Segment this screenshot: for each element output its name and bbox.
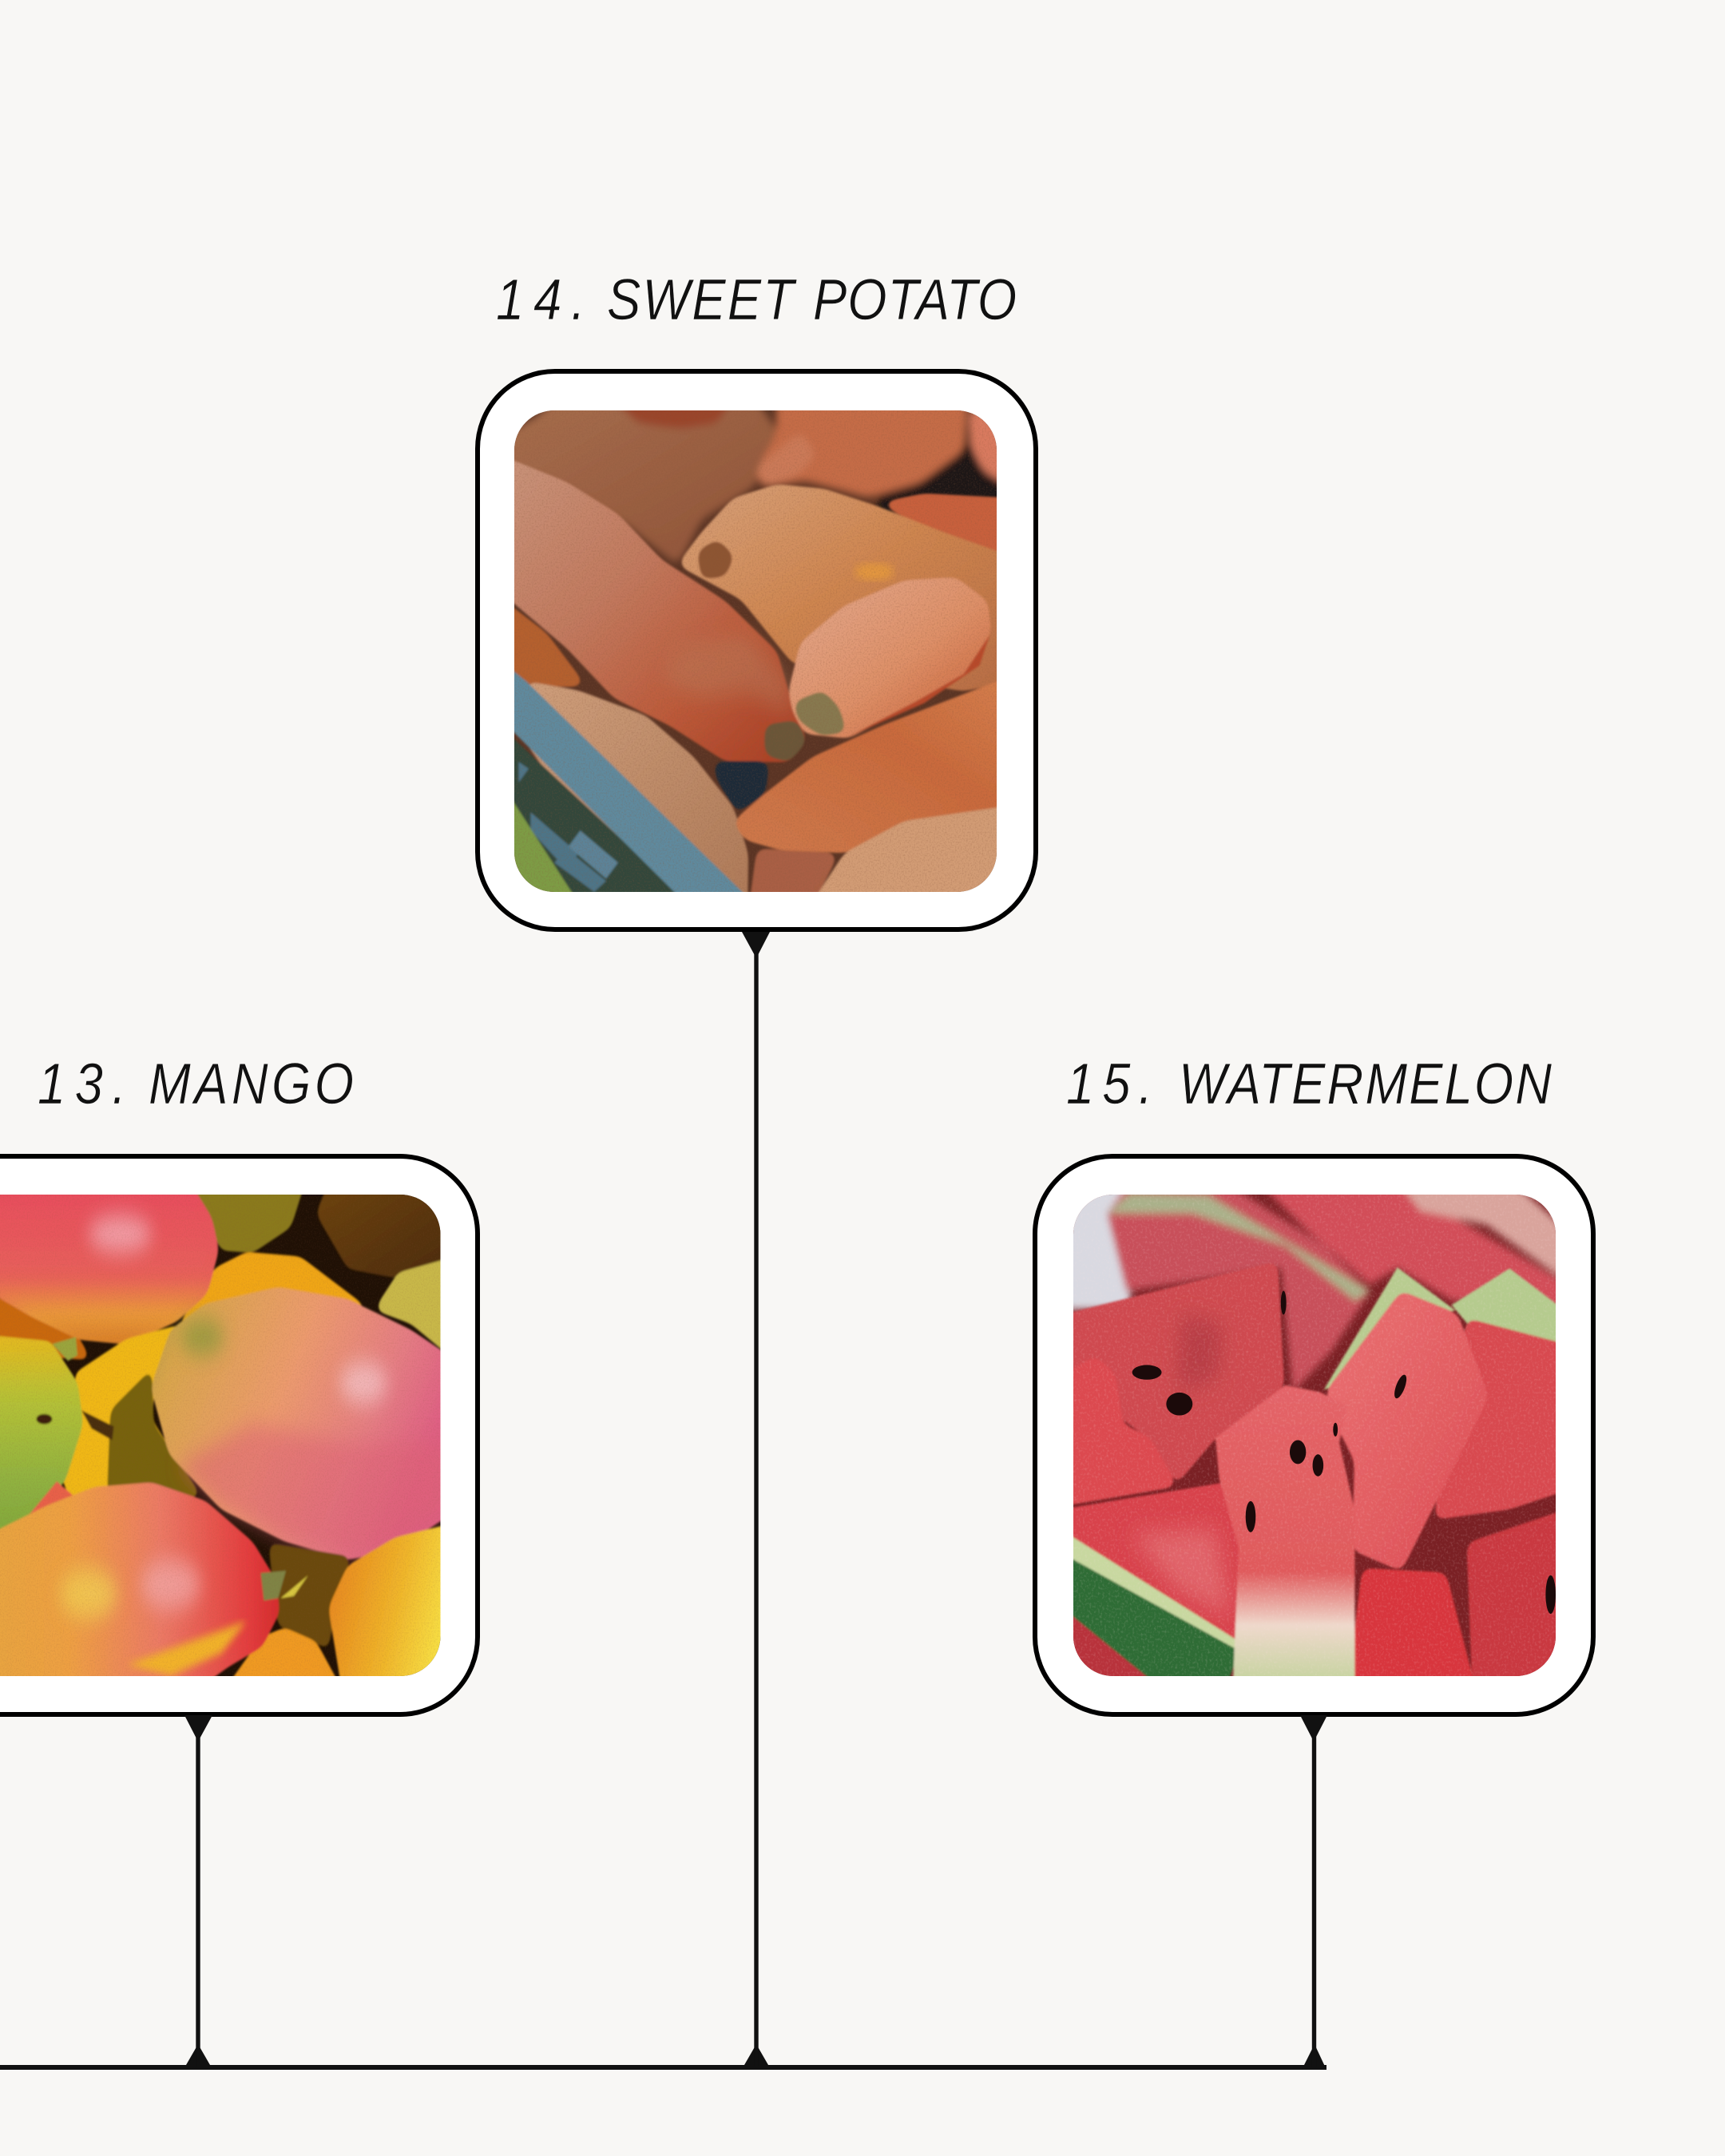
connector: baseline xyxy=(0,2044,1326,2070)
watermelon seeds xyxy=(1132,1290,1556,1614)
label: 15. watermelon: WATERMELON xyxy=(1179,1052,1552,1116)
label: 14. sweet potato: SWEET xyxy=(607,268,797,332)
connector: sweet potato stem xyxy=(742,932,770,2066)
card: watermelon xyxy=(1035,1156,1593,1714)
connector: mango stem xyxy=(184,1715,212,2067)
card: sweet potato xyxy=(478,371,1036,929)
label: 15. watermelon: 15. xyxy=(1066,1052,1152,1116)
label: 13. mango: MANGO xyxy=(149,1052,354,1116)
photo: watermelon xyxy=(1073,1195,1556,1676)
label: 14. sweet potato: 14. xyxy=(496,268,585,332)
label: 14. sweet potato: POTATO xyxy=(813,268,1017,332)
photo: mangoes xyxy=(0,1195,441,1676)
card: mango xyxy=(0,1156,478,1714)
label: 13. mango: 13. xyxy=(38,1052,126,1116)
photo: sweet potatoes xyxy=(514,410,997,892)
watermelon flesh texture xyxy=(1073,1195,1556,1676)
potato skin marks xyxy=(565,510,954,743)
connector: watermelon stem xyxy=(1300,1715,1327,2067)
